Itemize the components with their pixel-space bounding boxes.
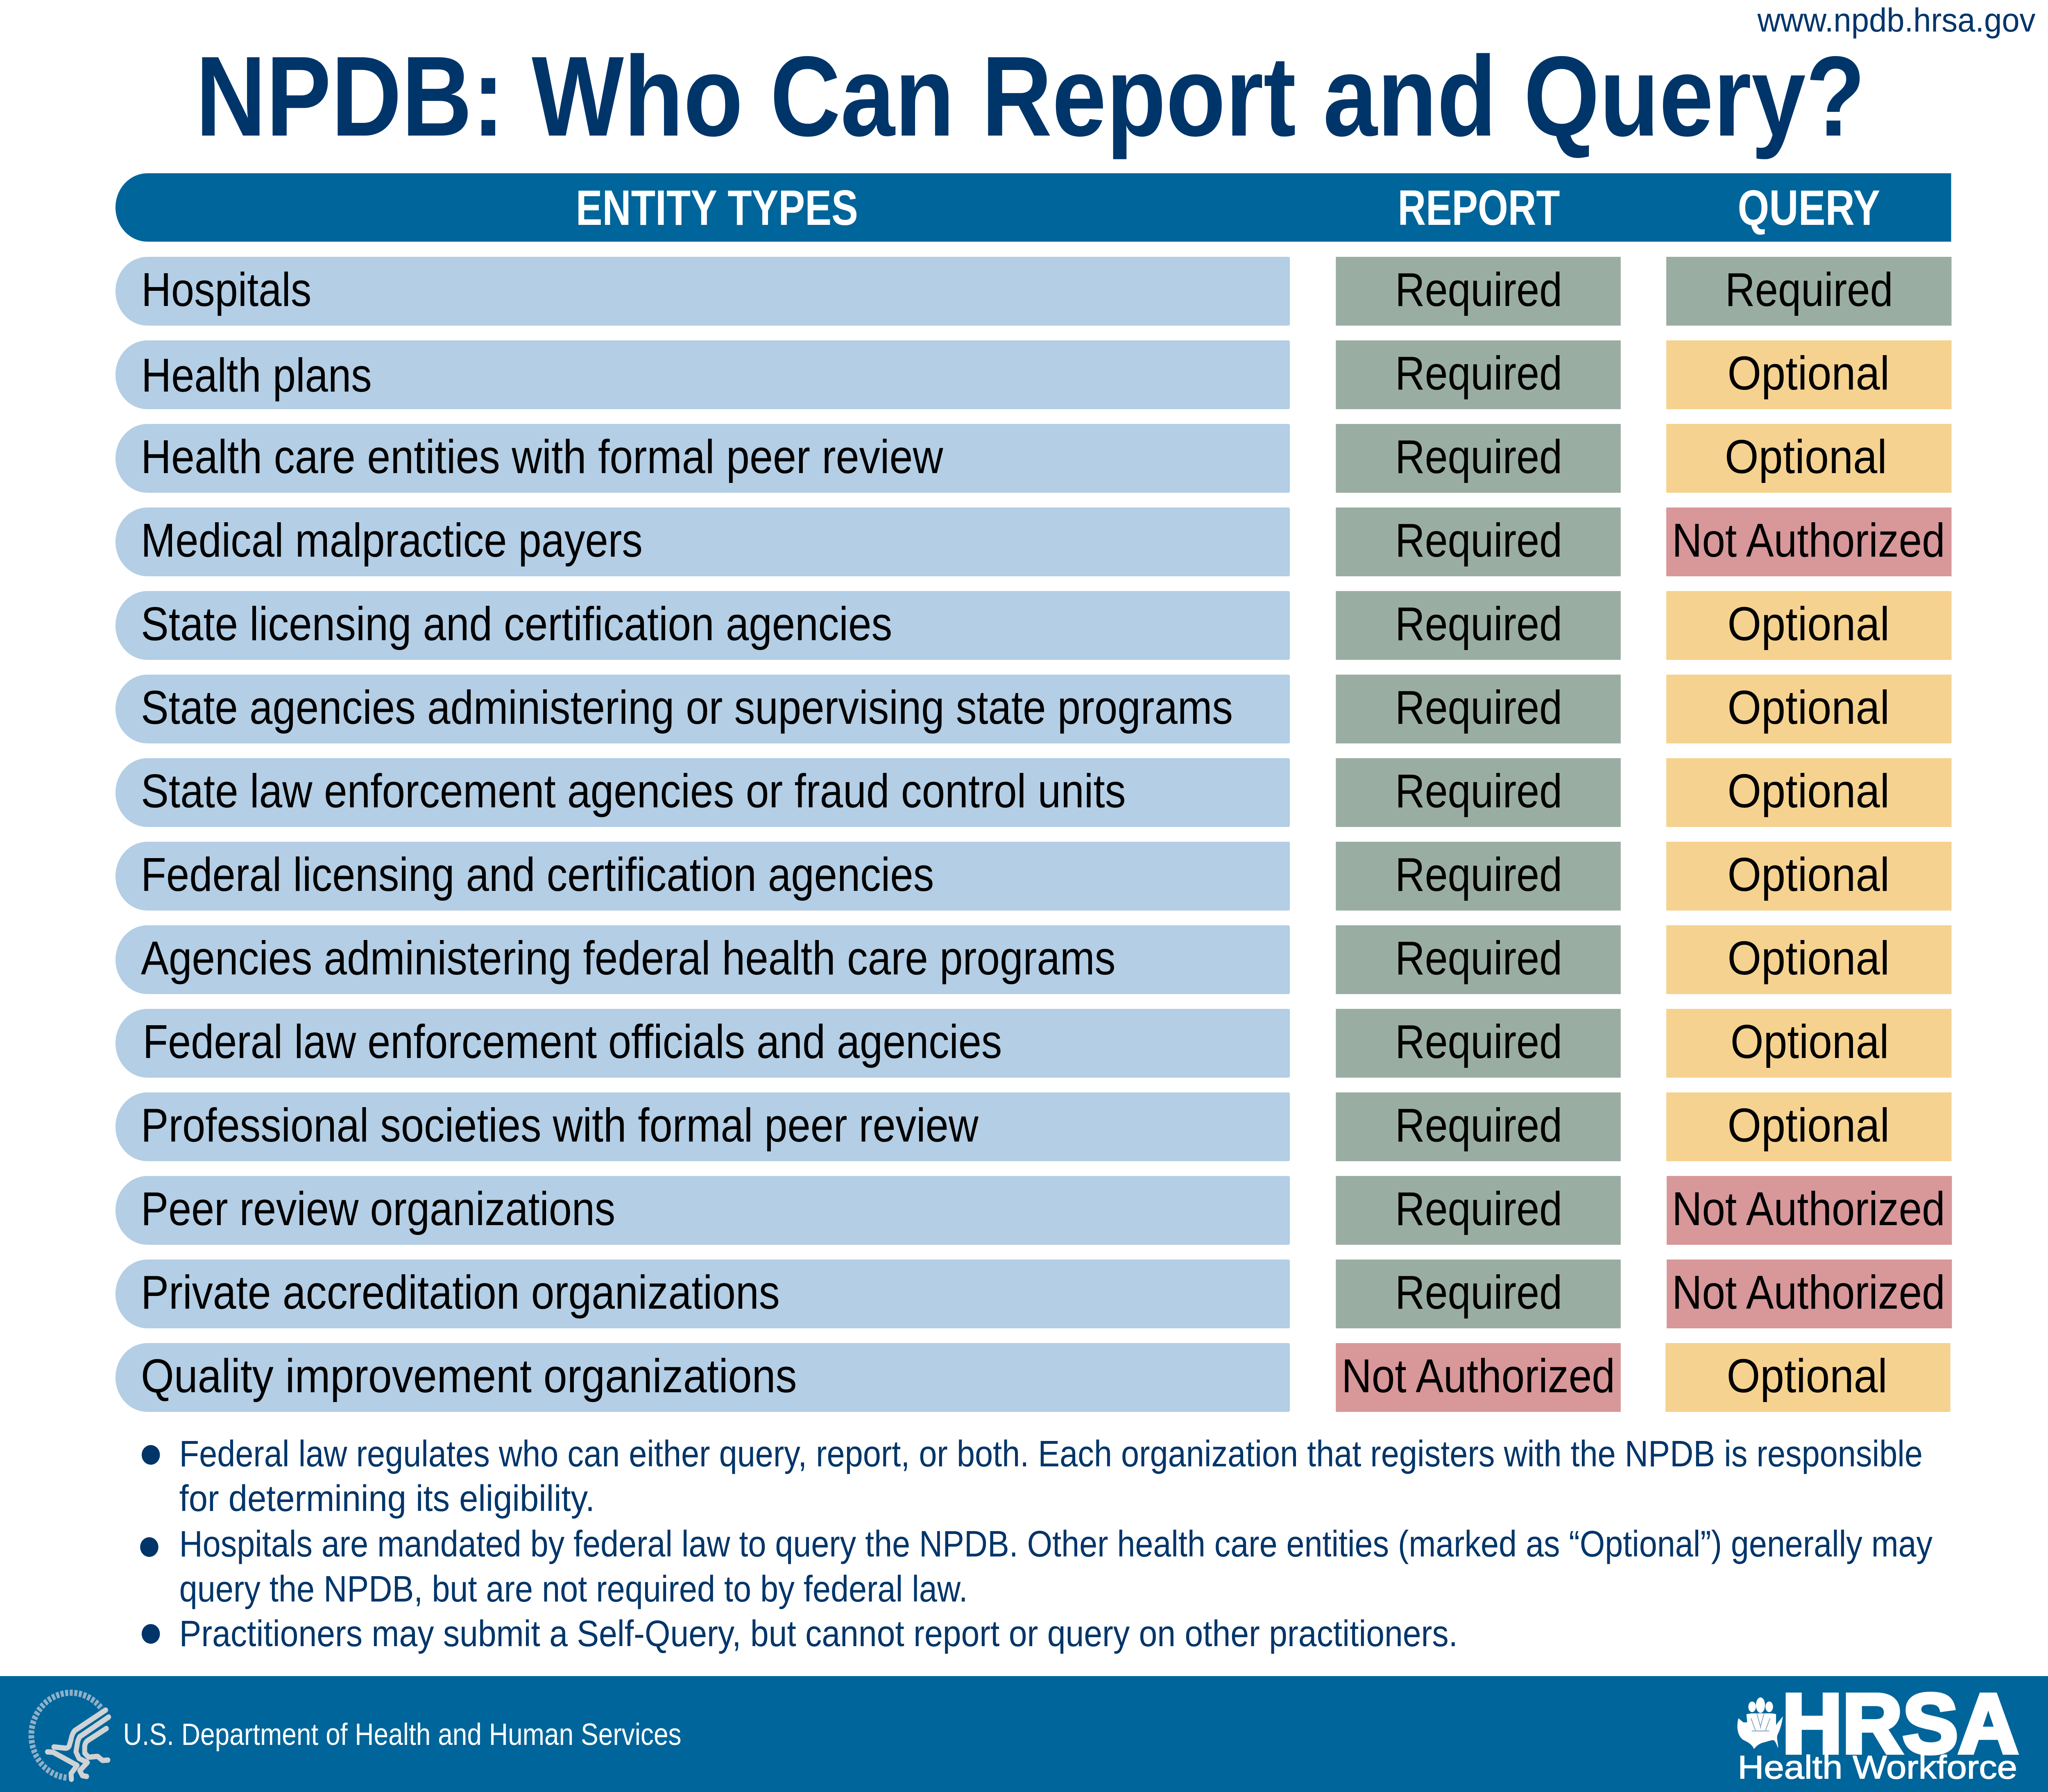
report status [1336, 1176, 1621, 1245]
entity label [116, 1260, 1290, 1328]
report status [1336, 507, 1621, 576]
row: State law enforcement agencies or fraud control units [116, 758, 1951, 827]
entity label [116, 925, 1290, 994]
icon: hands over US map [1738, 1697, 1783, 1749]
entity label [116, 257, 1290, 326]
query status: Not Authorized [1672, 514, 1945, 567]
query status: Not Authorized [1672, 1266, 1945, 1319]
report status: Required [1395, 681, 1562, 734]
report status: Required [1395, 764, 1562, 818]
entity label [116, 758, 1290, 827]
entity label [116, 507, 1290, 576]
report status: Required [1395, 514, 1562, 567]
entity label: Health care entities with formal peer review [141, 430, 944, 483]
query status: Optional [1727, 931, 1889, 985]
query status [1666, 1009, 1951, 1078]
table header bar: ENTITY TYPES [576, 180, 858, 236]
report status: Required [1395, 1099, 1562, 1152]
note 2: Hospitals are mandated by federal law to query the NPDB. Other health care entities (marked as “Optional”) generally may [179, 1523, 1933, 1565]
website url: www.npdb.hrsa.gov [1757, 1, 2036, 39]
query status [1666, 842, 1951, 911]
query status: Required [1725, 263, 1893, 316]
table header bar [116, 173, 1951, 242]
report status: Not Authorized [1341, 1349, 1615, 1402]
entity label [116, 1343, 1290, 1412]
row: Peer review organizations [116, 1176, 1952, 1245]
icon: HHS seal [32, 1693, 109, 1779]
row: State agencies administering or supervising state programs [116, 675, 1951, 743]
entity label [116, 1176, 1290, 1245]
row: Medical malpractice payers [116, 507, 1951, 576]
entity label [116, 1092, 1290, 1161]
report status [1336, 925, 1621, 994]
entity label: State licensing and certification agencies [141, 597, 892, 650]
query status [1666, 591, 1951, 660]
query status: Optional [1727, 597, 1889, 650]
entity label: Professional societies with formal peer review [141, 1099, 979, 1152]
entity label: State law enforcement agencies or fraud control units [141, 764, 1126, 818]
note 3: Practitioners may submit a Self-Query, but cannot report or query on other practitioners. [179, 1613, 1458, 1654]
report status [1336, 1092, 1621, 1161]
query status: Optional [1727, 681, 1889, 734]
report status [1336, 842, 1621, 911]
entity label: Private accreditation organizations [141, 1266, 780, 1319]
query status: Optional [1727, 1099, 1889, 1152]
query status: Optional [1725, 430, 1887, 483]
report status: Required [1395, 1182, 1562, 1235]
report status [1336, 424, 1621, 493]
entity label [116, 591, 1290, 660]
query status [1666, 424, 1951, 493]
row: Quality improvement organizations [116, 1343, 1951, 1412]
query status [1666, 675, 1951, 743]
entity label: Medical malpractice payers [141, 514, 643, 567]
note 2: query the NPDB, but are not required to by federal law. [179, 1568, 968, 1610]
report status: Required [1395, 931, 1562, 985]
row: Private accreditation organizations [116, 1260, 1952, 1328]
note 1 [142, 1433, 1923, 1519]
entity label [116, 1009, 1290, 1078]
entity label: Health plans [141, 349, 372, 402]
row: Agencies administering federal health care programs [116, 925, 1951, 994]
row: Health plans [116, 340, 1951, 409]
report status [1336, 340, 1621, 409]
query status [1666, 758, 1951, 827]
entity label: State agencies administering or supervising state programs [141, 681, 1233, 734]
report status [1336, 1260, 1621, 1328]
row: Federal law enforcement officials and agencies [116, 1009, 1951, 1078]
report status: Required [1395, 430, 1562, 483]
query status: Optional [1727, 1349, 1887, 1402]
report status: Required [1395, 347, 1562, 400]
query status [1666, 1092, 1951, 1161]
bullet notes [140, 1433, 1933, 1654]
table header bar: QUERY [1738, 180, 1880, 236]
entity label [116, 424, 1290, 493]
query status: Optional [1727, 347, 1889, 400]
entity label: Agencies administering federal health care programs [141, 931, 1115, 985]
row: Federal licensing and certification agencies [116, 842, 1951, 911]
report status [1336, 1009, 1621, 1078]
entity label: Hospitals [141, 263, 311, 316]
entity label: Peer review organizations [141, 1182, 615, 1235]
report status: Required [1395, 1266, 1562, 1319]
table header bar: REPORT [1398, 180, 1560, 236]
entity label [116, 340, 1290, 409]
title: NPDB: Who Can Report and Query? [196, 32, 1865, 161]
entity label [116, 842, 1290, 911]
department name: U.S. Department of Health and Human Services [123, 1718, 682, 1752]
query status [1666, 340, 1951, 409]
report status: Required [1395, 597, 1562, 650]
note 1: for determining its eligibility. [179, 1478, 595, 1519]
HRSA wordmark: HRSA [1782, 1676, 2019, 1771]
report status: Required [1395, 1015, 1562, 1068]
report status [1336, 758, 1621, 827]
entity label: Quality improvement organizations [141, 1349, 797, 1402]
query status: Optional [1727, 764, 1889, 818]
query status [1666, 257, 1951, 326]
query status: Optional [1731, 1015, 1889, 1068]
entity label: Federal law enforcement officials and agencies [143, 1015, 1002, 1068]
note 2 [140, 1523, 1933, 1610]
HRSA logo [1738, 1676, 2019, 1786]
report status: Required [1395, 263, 1562, 316]
report status: Required [1395, 848, 1562, 901]
query status: Optional [1727, 848, 1889, 901]
query status: Not Authorized [1672, 1182, 1945, 1235]
footer bar [0, 1676, 2048, 1792]
entity label: Federal licensing and certification agencies [141, 848, 934, 901]
report status [1336, 591, 1621, 660]
row: Professional societies with formal peer review [116, 1092, 1951, 1161]
report status [1336, 257, 1621, 326]
query status [1666, 925, 1951, 994]
note 1: Federal law regulates who can either query, report, or both. Each organization that registers with the NPDB is responsible [179, 1433, 1923, 1475]
query status [1665, 1343, 1951, 1412]
Health Workforce: Health Workforce [1738, 1749, 2017, 1786]
row: Health care entities with formal peer review [116, 424, 1951, 493]
report status [1336, 675, 1621, 743]
row: Hospitals [116, 257, 1951, 326]
row: State licensing and certification agencies [116, 591, 1951, 660]
